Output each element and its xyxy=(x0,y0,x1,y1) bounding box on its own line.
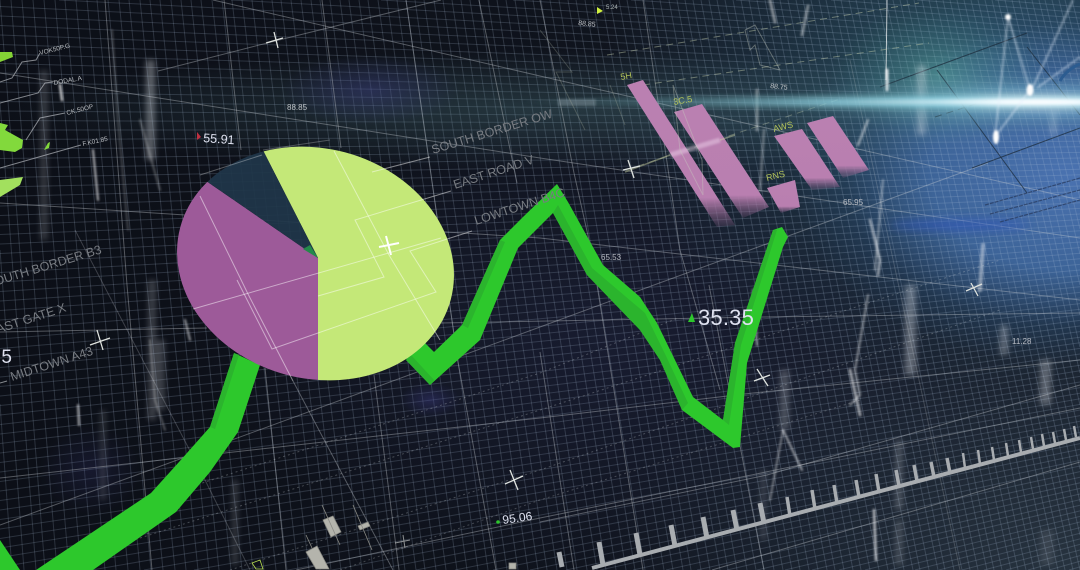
measurement scale xyxy=(559,426,1080,568)
map shapes xyxy=(0,52,50,197)
network lines in flare xyxy=(993,0,1080,144)
district labels: MIDTOWN A43 xyxy=(9,344,95,384)
pie slice: dark xyxy=(208,152,318,258)
district labels: LOWTOWN B4C xyxy=(473,185,567,228)
data values: 35.35 xyxy=(698,305,754,330)
data values: 65.53 xyxy=(601,253,622,262)
data values: 95.06 xyxy=(501,509,533,527)
small leader labels xyxy=(0,43,109,168)
small leader labels: DODAL.A xyxy=(53,75,83,87)
data values: 88.75 xyxy=(770,83,788,92)
blue arc xyxy=(1060,64,1080,81)
overlay lines on pie xyxy=(193,140,472,381)
district labels: SOUTH BORDER OW xyxy=(430,107,554,157)
data values: 55.91 xyxy=(203,131,235,147)
data values: 5.24 xyxy=(606,5,618,11)
crosshair markers xyxy=(90,32,982,548)
bar chart labels: AWS xyxy=(772,119,794,134)
rising green line xyxy=(0,184,788,570)
pie slice: lime xyxy=(264,146,454,380)
candlestick marks xyxy=(252,505,516,569)
lens flare xyxy=(520,72,1080,230)
data values: 88.85 xyxy=(287,103,308,112)
data values: 5 xyxy=(1,347,12,368)
bar chart labels: 5H xyxy=(620,70,633,82)
data values: 11.28 xyxy=(1012,337,1032,346)
pie chart xyxy=(177,146,454,380)
small leader labels: VOK50P.G xyxy=(39,43,71,57)
bar chart labels xyxy=(620,70,794,183)
upper right segment of green line xyxy=(406,184,788,448)
pie slice: purple xyxy=(177,182,318,380)
small leader labels: CK.50OP xyxy=(66,104,94,117)
district labels: EAST ROAD V xyxy=(452,152,536,192)
data values: 65.95 xyxy=(843,198,864,207)
bar chart labels: RNS xyxy=(765,169,786,183)
lower left segment of green line xyxy=(36,353,260,570)
dark lines in flare xyxy=(880,33,1080,193)
bar highlight and outlines xyxy=(540,25,780,195)
bar chart labels: 3C.5 xyxy=(673,94,693,107)
text lines in flare xyxy=(985,178,1080,222)
data values: 88.85 xyxy=(578,20,596,29)
purple bar chart xyxy=(627,80,869,227)
district labels xyxy=(0,107,567,384)
small leader labels: F.K01.85 xyxy=(82,136,109,148)
